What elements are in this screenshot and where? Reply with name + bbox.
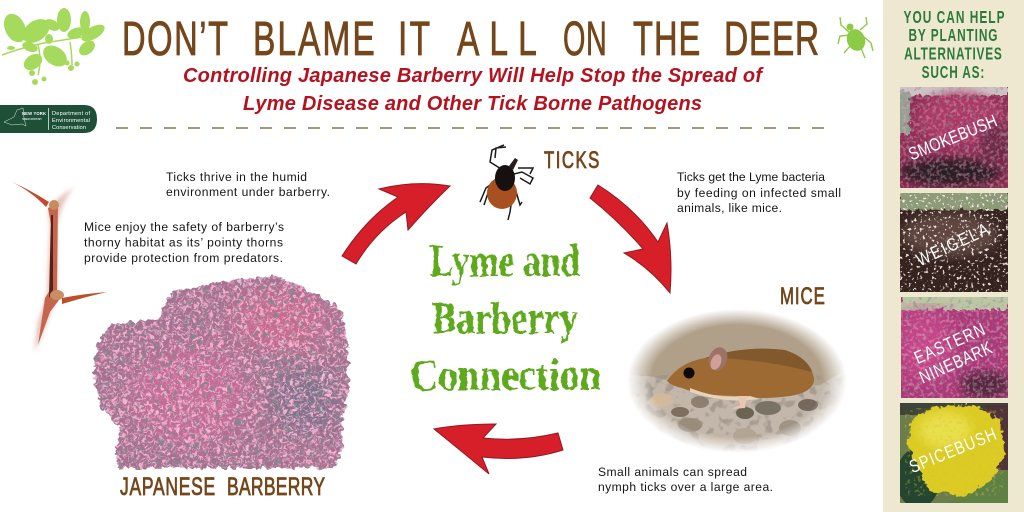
title: THE: [633, 12, 700, 66]
icon: green branch with leaves: [0, 8, 107, 85]
photo: mouse on gravel: [630, 310, 845, 452]
center title: Lyme and Barberry Connection: Barberry: [432, 292, 578, 343]
text: mice and thorny habitat: provide protection from predators.: [84, 251, 283, 265]
title: DON’T: [122, 12, 228, 66]
logo: NYS Department of Environmental Conservation: Environmental: [52, 118, 90, 124]
photo: eastern ninebark: [897, 294, 1010, 399]
title: DEER: [724, 11, 819, 65]
text: ticks thrive: environment under barberry.: [166, 185, 330, 199]
label: eastern ninebark: EASTERN: [911, 320, 988, 368]
text: ticks get bacteria: animals, like mice.: [677, 201, 782, 215]
photo: weigela: [900, 190, 1008, 292]
logo: NYS Department of Environmental Conservation: NEW YORK: [22, 111, 46, 116]
text: ticks get bacteria: by feeding on infected small: [677, 186, 841, 200]
photo: weigela: WEIGELA: [913, 220, 992, 270]
text: ticks get bacteria: Ticks get the Lyme bacteria: [677, 170, 825, 184]
subtitle: [183, 65, 764, 115]
icon: green tick: [838, 17, 873, 58]
icon: tick: [480, 145, 533, 220]
title: ALL: [457, 11, 537, 65]
arrow: mice to barberry: [434, 424, 563, 474]
label: japanese barberry: BARBERRY: [227, 472, 325, 501]
center title: Lyme and Barberry Connection: Connection: [410, 349, 601, 400]
logo: NYS Department of Environmental Conservation: Conservation: [52, 125, 86, 131]
heading: you can help: YOU CAN HELP: [904, 8, 1004, 28]
heading: you can help: ALTERNATIVES: [904, 44, 1002, 64]
photo: spicebush: [896, 403, 1008, 508]
photo: spicebush: SPICEBUSH: [907, 424, 999, 477]
heading: you can help: BY PLANTING: [908, 26, 998, 46]
logo: NYS Department of Environmental Conservation: Department of: [52, 111, 90, 117]
arrow: ticks to mice: [590, 185, 671, 293]
title: ON: [563, 13, 607, 66]
label: mice: MICE: [780, 283, 825, 310]
text: mice and thorny habitat: thorny habitat as its’ pointy thorns: [84, 236, 283, 250]
photo: smokebush: [896, 84, 1010, 188]
text: mice and thorny habitat: Mice enjoy the safety of barberry’s: [84, 220, 284, 234]
subtitle: Controlling Japanese Barberry Will Help Stop the Spread of: [183, 65, 764, 87]
text: ticks thrive: Ticks thrive in the humid: [166, 170, 307, 184]
title: BLAME: [253, 11, 375, 65]
icon: barberry thorn stem: [12, 182, 107, 352]
text: small animals spread nymphs: Small animals can spread: [598, 465, 747, 479]
logo: NYS Department of Environmental Conservation: [0, 105, 97, 133]
subtitle: Lyme Disease and Other Tick Borne Pathogens: [243, 93, 702, 115]
text: ticks get bacteria: [677, 170, 841, 215]
text: ticks thrive: [166, 170, 330, 199]
panel: alternatives sidebar: [883, 0, 1024, 512]
title: IT: [398, 11, 430, 65]
label: japanese barberry: JAPANESE: [120, 472, 215, 501]
text: small animals spread nymphs: [598, 465, 773, 494]
center title: Lyme and Barberry Connection: Lyme and: [430, 235, 580, 286]
label: ticks: TICKS: [544, 147, 599, 174]
title: [122, 11, 819, 66]
text: mice and thorny habitat: [84, 220, 284, 265]
label: eastern ninebark: [911, 320, 995, 388]
arrow: barberry to ticks: [342, 184, 450, 264]
heading: you can help: SUCH AS:: [922, 63, 984, 83]
label: eastern ninebark: NINEBARK: [916, 338, 995, 388]
heading: you can help: [904, 8, 1004, 83]
logo: NYS Department of Environmental Conservation: STATE OF OPPORTUNITY: [22, 117, 42, 121]
label: japanese barberry: [120, 472, 325, 501]
photo: japanese barberry bush: [85, 270, 355, 475]
photo: smokebush: SMOKEBUSH: [906, 111, 1000, 165]
text: small animals spread nymphs: nymph ticks over a large area.: [598, 480, 773, 494]
center title: Lyme and Barberry Connection: [410, 235, 601, 400]
